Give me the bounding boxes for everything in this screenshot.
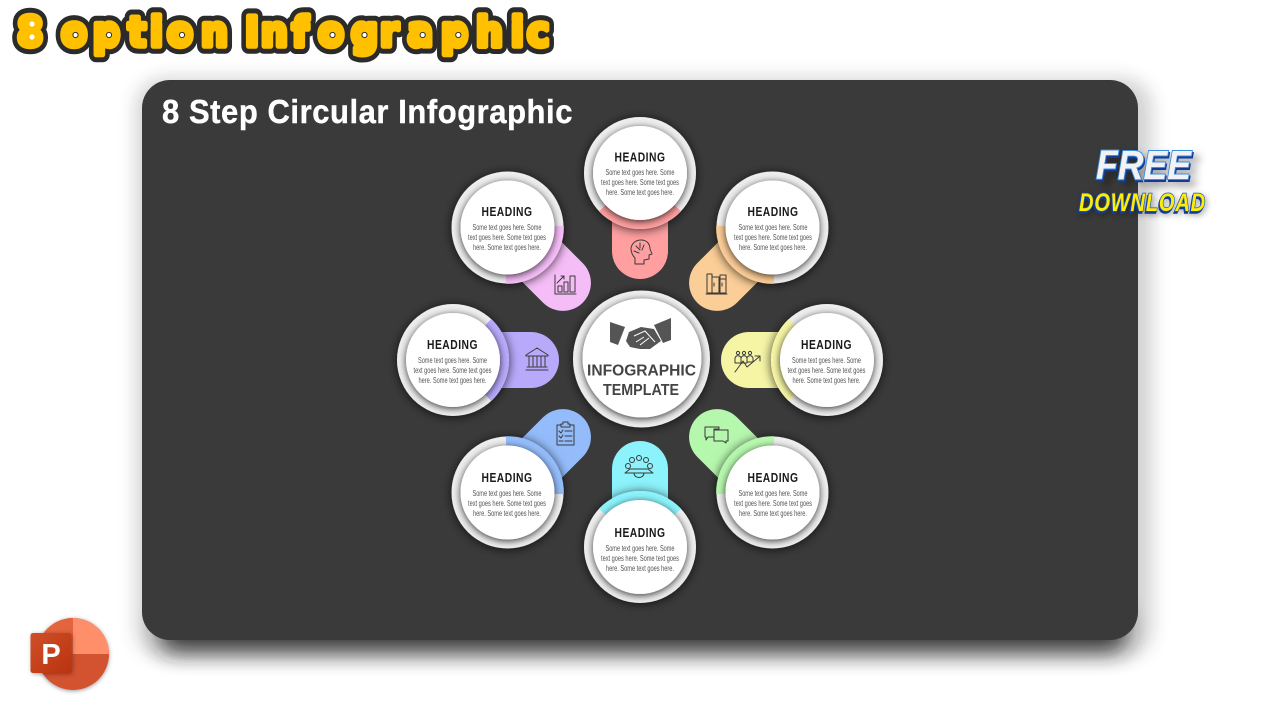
inner circle (406, 313, 500, 407)
body text: text goes here. Some text goes (601, 178, 679, 187)
hub title: TEMPLATE (603, 382, 679, 399)
body text: Some text goes here. Some (738, 489, 808, 498)
inner circle (780, 313, 874, 407)
body text: text goes here. Some text goes (468, 233, 546, 242)
icon: handshake (610, 318, 671, 349)
pill (514, 234, 603, 323)
body text (734, 489, 812, 518)
pill (612, 441, 668, 510)
body text (734, 223, 812, 252)
body text: here. Some text goes here. (606, 188, 674, 197)
body text (601, 544, 679, 573)
body text: Some text goes here. Some (606, 544, 675, 553)
pill (721, 332, 790, 388)
step 1: top red (584, 117, 696, 279)
step 5: cyan (584, 441, 696, 603)
heading: HEADING (482, 471, 532, 485)
free label: FREE (1096, 142, 1192, 188)
body text (468, 489, 546, 518)
icon: books (706, 274, 727, 294)
ring (452, 172, 576, 296)
page title: 8 option Infographic (17, 9, 549, 56)
body text (788, 356, 866, 385)
pill (677, 397, 766, 486)
hub title (587, 362, 696, 399)
step 3: yellow (721, 304, 883, 416)
pill (612, 210, 668, 279)
ring (584, 491, 696, 603)
body text: text goes here. Some text goes (734, 233, 812, 242)
body text: text goes here. Some text goes (601, 554, 679, 563)
step 6: blue (452, 397, 603, 548)
pill (490, 332, 559, 388)
heading: HEADING (748, 471, 798, 485)
body text: here. Some text goes here. (473, 243, 541, 252)
body text (601, 168, 679, 197)
icon: chat (705, 427, 728, 443)
body text: Some text goes here. Some (606, 168, 675, 177)
page title: 8 option Infographic (17, 9, 549, 56)
inner circle (726, 446, 820, 540)
step 7: purple (397, 304, 559, 416)
body text: Some text goes here. Some (472, 223, 542, 232)
hub title: INFOGRAPHIC (587, 362, 696, 380)
body text: Some text goes here. Some (738, 223, 808, 232)
inner circle (593, 500, 687, 594)
heading: HEADING (614, 526, 666, 540)
panel bottom shadow (160, 606, 1126, 652)
heading: HEADING (801, 338, 852, 352)
body text (468, 223, 546, 252)
heading: HEADING (482, 205, 532, 219)
icon: bank (526, 348, 548, 370)
ring (771, 304, 883, 416)
icon: clipboard (557, 422, 574, 445)
ring (584, 117, 696, 229)
panel faint shadow (136, 78, 1152, 658)
center hub (573, 290, 710, 428)
hub inner circle (582, 298, 702, 418)
pill (677, 234, 766, 323)
free download badge (1079, 142, 1206, 217)
inner circle (726, 180, 820, 274)
step 8: pink (452, 172, 603, 323)
icon: bar chart (555, 275, 576, 294)
ring (452, 424, 576, 548)
body text (414, 356, 492, 385)
body text: here. Some text goes here. (473, 509, 541, 518)
body text: here. Some text goes here. (792, 376, 860, 385)
heading: HEADING (748, 205, 798, 219)
heading: HEADING (427, 338, 478, 352)
ring (704, 424, 828, 548)
pill (514, 397, 603, 486)
inner circle (460, 446, 554, 540)
body text: here. Some text goes here. (739, 243, 807, 252)
body text: here. Some text goes here. (606, 564, 674, 573)
icon: head (631, 240, 652, 264)
hub ring (573, 290, 710, 428)
icon: team growth (735, 351, 760, 372)
step 4: green (677, 397, 828, 548)
inner circle (460, 180, 554, 274)
inner circle (593, 126, 687, 220)
body text: Some text goes here. Some (792, 356, 861, 365)
ring (704, 172, 828, 296)
step 2: orange (677, 172, 828, 323)
body text: text goes here. Some text goes (414, 366, 492, 375)
body text: text goes here. Some text goes (734, 499, 812, 508)
body text: Some text goes here. Some (418, 356, 487, 365)
icon: powerpoint logo (30, 618, 109, 690)
body text: here. Some text goes here. (418, 376, 486, 385)
icon: powerpoint logo: P (41, 639, 61, 671)
dark panel (142, 80, 1138, 640)
body text: here. Some text goes here. (739, 509, 807, 518)
heading: HEADING (614, 150, 666, 164)
download label: DOWNLOAD (1079, 189, 1206, 217)
panel heading: 8 Step Circular Infographic (162, 93, 573, 130)
body text: Some text goes here. Some (472, 489, 542, 498)
ring (397, 304, 509, 416)
icon: meeting table (625, 456, 653, 478)
body text: text goes here. Some text goes (788, 366, 866, 375)
body text: text goes here. Some text goes (468, 499, 546, 508)
